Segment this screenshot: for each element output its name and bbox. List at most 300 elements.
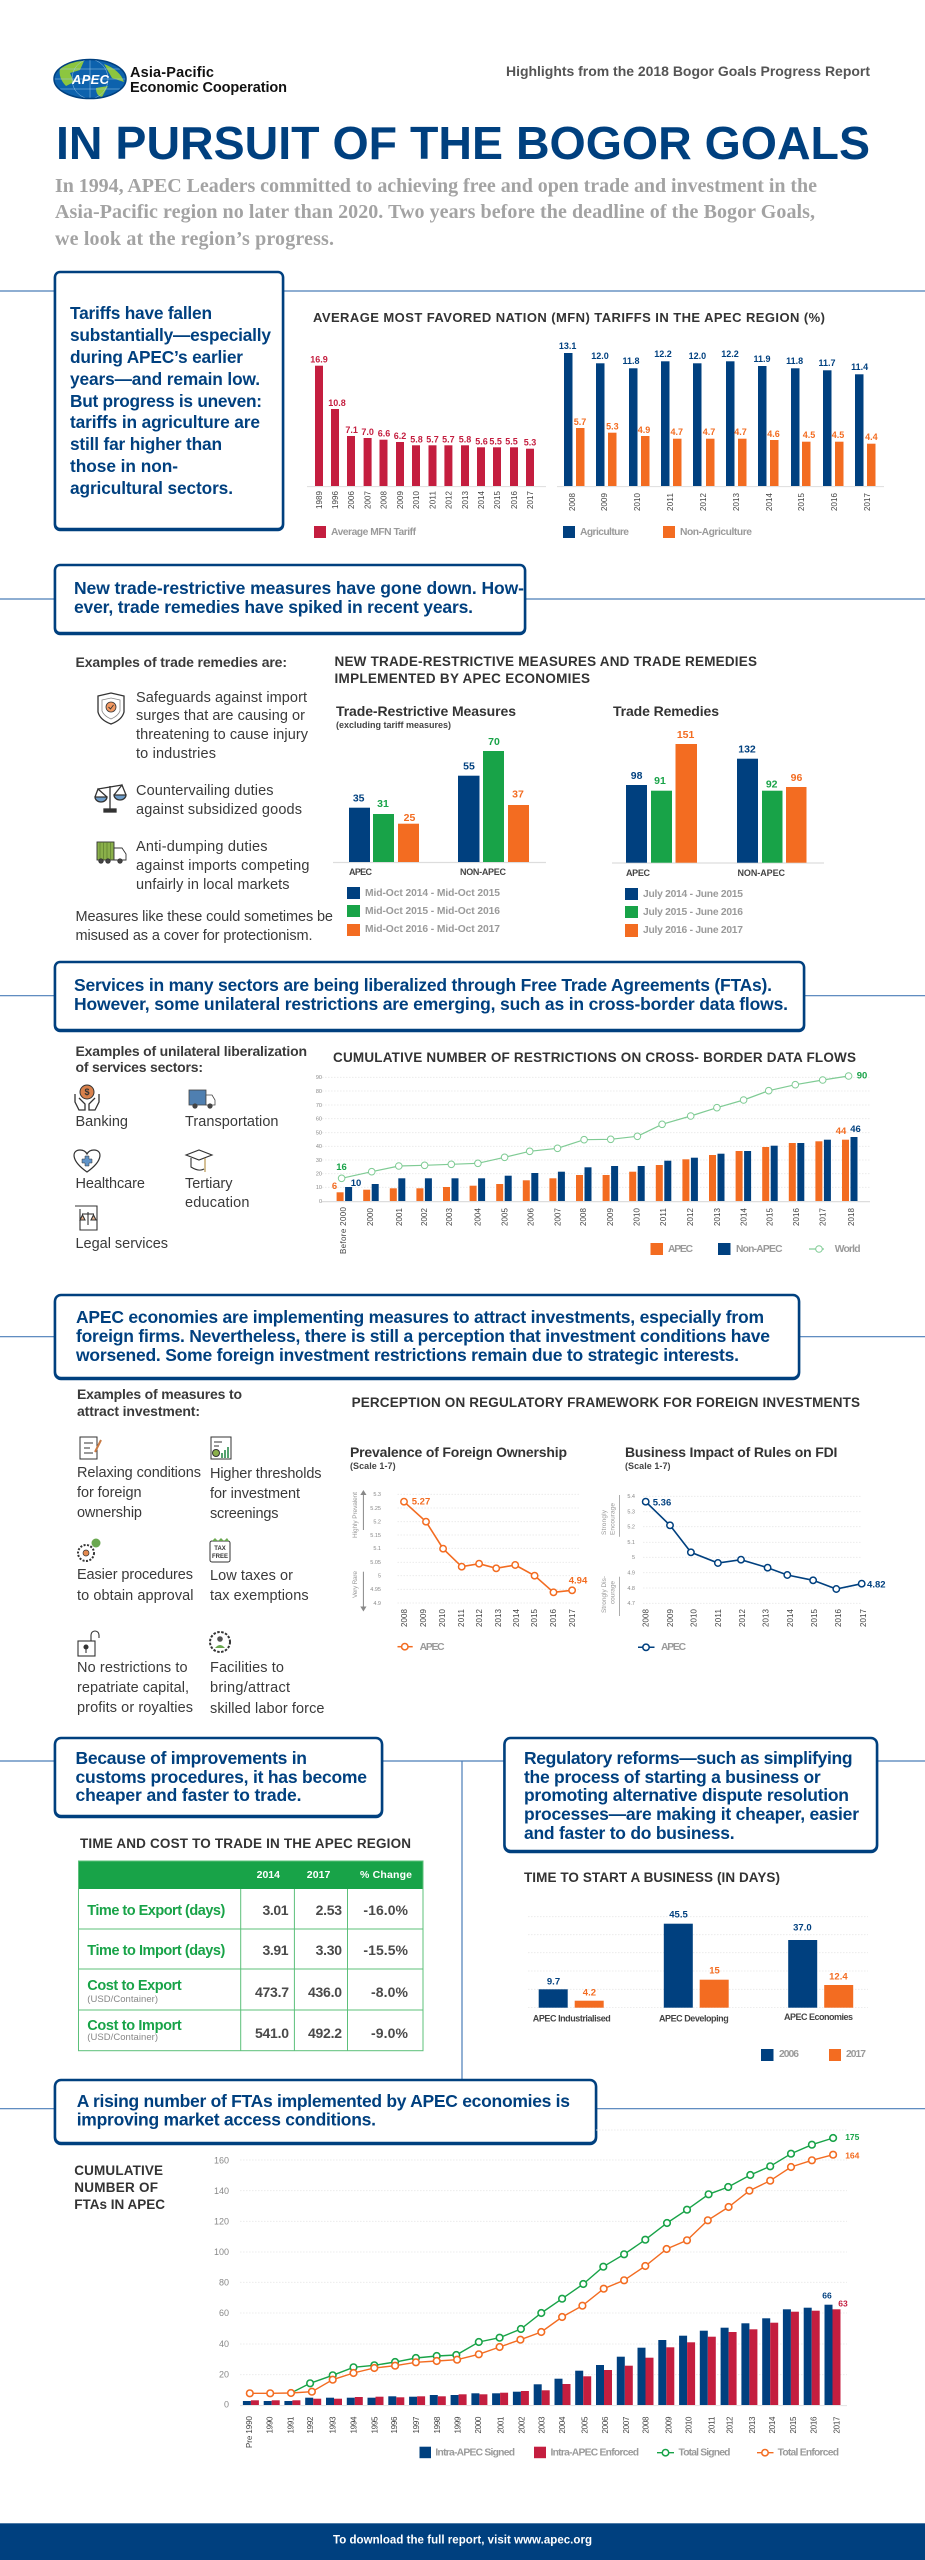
line chart: foreign ownership: Very Rare xyxy=(352,1571,359,1598)
table: time and cost to trade: 541.0 xyxy=(255,2025,289,2041)
combo chart: cumulative FTAs: 2006 xyxy=(601,2416,610,2434)
line chart: foreign ownership: Highly Prevalent xyxy=(352,1492,359,1538)
legend: trade-restrictive measures periods: Mid-Oct 2015 - Mid-Oct 2016 xyxy=(365,906,500,917)
bar chart: time to start a business: APEC Industrialised xyxy=(533,2014,611,2024)
text: relaxing conditions: Relaxing conditions xyxy=(77,1465,201,1481)
line chart: impact of rules on FDI: 2017 xyxy=(859,1608,868,1627)
callout: tariffs xyxy=(55,272,283,529)
section 3: services and data flows xyxy=(0,962,925,1255)
combo chart: cumulative FTAs: 2008 xyxy=(641,2416,650,2434)
bar chart: trade-restrictive measures: APEC xyxy=(349,867,372,877)
bar chart: average MFN tariff: 5.7 xyxy=(426,434,439,444)
legend: FTA series: Intra-APEC Enforced xyxy=(550,2448,639,2459)
bar chart: agriculture vs non-agriculture: 13.1 xyxy=(559,341,576,351)
line chart: impact of rules on FDI: 2013 xyxy=(762,1608,771,1627)
bar chart: average MFN tariff: 2011 xyxy=(428,490,438,509)
callout: trade-restrictive measures: ever, trade remedies have spiked in recent years. xyxy=(74,597,473,617)
text: higher thresholds: Higher thresholds xyxy=(210,1466,322,1482)
icon: tertiary education xyxy=(186,1150,212,1172)
bar chart: agriculture vs non-agriculture xyxy=(557,341,884,511)
bar chart: average MFN tariff: 1996 xyxy=(331,490,340,509)
legend: 2006 and 2017 xyxy=(761,2049,866,2061)
chart subtitle: trade-restrictive measures: Trade-Restrictive Measures xyxy=(336,703,516,719)
icon: legal services xyxy=(75,1206,97,1230)
line chart: impact of rules on FDI: 2015 xyxy=(810,1608,819,1627)
chart heading: MFN tariffs: AVERAGE MOST FAVORED NATION (MFN) TARIFFS IN THE APEC REGION (%) xyxy=(313,310,825,325)
chart subtitle: trade-restrictive measures xyxy=(336,703,516,730)
legend: trade remedies periods: July 2014 - June 2015 xyxy=(643,889,743,900)
section 5: connecting rules xyxy=(0,1738,925,2082)
chart subtitle: foreign ownership xyxy=(350,1444,567,1471)
bar chart: time to start a business: 15 xyxy=(709,1965,720,1976)
bar chart: average MFN tariff: 6.2 xyxy=(394,431,406,441)
bar chart: trade remedies xyxy=(612,729,824,878)
legend: FTA series: Total Enforced xyxy=(778,2448,839,2459)
table: time and cost to trade: -9.0% xyxy=(371,2025,409,2041)
text: examples of liberalization heading: Examples of unilateral liberalization xyxy=(76,1043,307,1059)
legend: trade remedies periods: July 2015 - June 2016 xyxy=(643,907,743,918)
bar chart: average MFN tariff: 2008 xyxy=(380,490,388,509)
callout: regulatory reforms: processes—are making it cheaper, easier xyxy=(524,1804,859,1824)
title: IN PURSUIT OF THE BOGOR GOALS xyxy=(56,117,870,169)
icon: unlocked padlock xyxy=(78,1631,99,1656)
bar chart: trade remedies: 91 xyxy=(654,775,666,787)
bar chart: agriculture vs non-agriculture: 4.7 xyxy=(734,427,747,437)
combo chart: data flow restrictions: 90 xyxy=(316,1075,322,1081)
bar chart: agriculture vs non-agriculture: 11.4 xyxy=(851,362,868,372)
combo chart: cumulative FTAs: 2002 xyxy=(517,2416,526,2434)
table: time and cost to trade: 2.53 xyxy=(316,1902,342,1918)
bar chart: trade-restrictive measures: 35 xyxy=(353,793,365,805)
table: time and cost to trade: % Change xyxy=(360,1869,412,1881)
combo chart: cumulative FTAs: 2016 xyxy=(810,2416,819,2434)
combo chart: cumulative FTAs: 66 xyxy=(822,2291,832,2301)
table heading: time and cost to trade: TIME AND COST TO TRADE IN THE APEC REGION xyxy=(80,1836,411,1851)
organisation name xyxy=(130,65,287,96)
bar chart: time to start a business: 12.4 xyxy=(829,1971,848,1982)
line chart: impact of rules on FDI: 5.36 xyxy=(653,1497,671,1508)
bar chart: average MFN tariff: 16.9 xyxy=(310,355,328,365)
bar chart: trade-restrictive measures: 70 xyxy=(488,736,500,748)
bar chart: trade-restrictive measures: 55 xyxy=(463,761,475,773)
combo chart: cumulative FTAs: 120 xyxy=(214,2216,229,2226)
combo chart: data flow restrictions: 2003 xyxy=(445,1207,454,1226)
combo chart: data flow restrictions: 20 xyxy=(316,1172,322,1178)
chart heading: cumulative FTAs: CUMULATIVE xyxy=(74,2163,163,2178)
icon: truck xyxy=(97,842,126,863)
combo chart: cumulative FTAs: 1995 xyxy=(370,2416,379,2434)
text: easier procedures xyxy=(77,1567,194,1604)
section 2: trade remedies xyxy=(0,565,925,944)
bar chart: agriculture vs non-agriculture: 12.0 xyxy=(689,351,706,361)
combo chart: cumulative FTAs: 60 xyxy=(219,2308,229,2318)
line chart: foreign ownership xyxy=(352,1491,588,1627)
icon: skilled worker gear xyxy=(210,1632,230,1652)
chart heading: cumulative FTAs: FTAs IN APEC xyxy=(74,2197,165,2212)
line chart: impact of rules on FDI: 2010 xyxy=(690,1608,699,1627)
bar chart: time to start a business: 37.0 xyxy=(793,1923,812,1934)
text: easier procedures: to obtain approval xyxy=(77,1588,194,1604)
text: low taxes xyxy=(210,1568,309,1604)
callout: trade-restrictive measures: New trade-restrictive measures have gone down. How- xyxy=(74,578,524,598)
icon: banking xyxy=(75,1085,99,1110)
combo chart: data flow restrictions: 2018 xyxy=(847,1207,856,1226)
table: time and cost to trade: Time to Export (days) xyxy=(87,1903,225,1919)
text: safeguards: to industries xyxy=(136,746,216,762)
line chart: impact of rules on FDI: 2008 xyxy=(642,1608,651,1627)
line chart: impact of rules on FDI: Strongly xyxy=(601,1509,608,1535)
bar chart: trade remedies: 96 xyxy=(791,772,802,784)
combo chart: cumulative FTAs: 175 xyxy=(845,2132,860,2142)
bar chart: agriculture vs non-agriculture: 4.5 xyxy=(832,430,844,440)
combo chart: data flow restrictions: 90 xyxy=(857,1071,867,1082)
table: time and cost to trade: (USD/Container) xyxy=(87,2032,158,2043)
bar chart: agriculture vs non-agriculture: 11.7 xyxy=(818,358,836,368)
line chart: foreign ownership: 5 xyxy=(378,1574,381,1580)
combo chart: cumulative FTAs: 140 xyxy=(214,2186,229,2196)
legend: FTA series xyxy=(420,2447,839,2459)
bar chart: agriculture vs non-agriculture: 11.8 xyxy=(786,356,803,366)
callout: tariffs: still far higher than xyxy=(70,434,222,454)
callout: tariffs: But progress is uneven: xyxy=(70,391,262,411)
combo chart: data flow restrictions: 40 xyxy=(316,1144,322,1150)
line chart: impact of rules on FDI xyxy=(601,1494,886,1627)
text: protectionism note xyxy=(76,909,333,944)
combo chart: data flow restrictions xyxy=(316,1071,870,1254)
combo chart: cumulative FTAs: 1999 xyxy=(454,2416,463,2434)
legend: trade remedies periods: July 2016 - June 2017 xyxy=(643,925,743,936)
line chart: impact of rules on FDI: 5.4 xyxy=(627,1494,635,1500)
bar chart: agriculture vs non-agriculture: 4.6 xyxy=(767,429,780,439)
bar chart: agriculture vs non-agriculture: 11.9 xyxy=(753,354,771,364)
callout: tariffs: substantially—especially xyxy=(70,325,271,345)
text: facilities: skilled labor force xyxy=(210,1701,324,1717)
bar chart: agriculture vs non-agriculture: 4.7 xyxy=(670,427,683,437)
icon: shield xyxy=(98,693,124,724)
table: time and cost to trade: -8.0% xyxy=(371,1984,409,2000)
icon: scroll and pen xyxy=(80,1437,101,1459)
chart heading: new measures and remedies: IMPLEMENTED BY APEC ECONOMIES xyxy=(334,671,590,686)
combo chart: cumulative FTAs: 2011 xyxy=(708,2416,717,2434)
table: time and cost to trade xyxy=(78,1861,423,2051)
text: safeguards xyxy=(136,690,309,762)
combo chart: data flow restrictions: 70 xyxy=(316,1103,322,1109)
bar chart: agriculture vs non-agriculture: 12.2 xyxy=(721,349,739,359)
line chart: foreign ownership: 4.94 xyxy=(569,1575,588,1586)
combo chart: data flow restrictions: Before 2000 xyxy=(339,1206,348,1254)
line chart: foreign ownership: 5.25 xyxy=(370,1506,381,1512)
bar chart: average MFN tariff: 7.0 xyxy=(361,427,374,437)
combo chart: cumulative FTAs: 1997 xyxy=(412,2416,421,2434)
table: time and cost to trade: -16.0% xyxy=(363,1902,409,1918)
bar chart: agriculture vs non-agriculture: 5.3 xyxy=(606,422,619,432)
line chart: impact of rules on FDI: 5.1 xyxy=(627,1540,635,1546)
legend: average MFN tariff: Average MFN Tariff xyxy=(331,527,417,538)
line chart: impact of rules on FDI: 2016 xyxy=(834,1608,843,1627)
bar chart: trade-restrictive measures: 37 xyxy=(512,789,524,801)
combo chart: data flow restrictions: 2016 xyxy=(792,1207,801,1226)
callout: regulatory reforms xyxy=(504,1738,877,1851)
line chart: impact of rules on FDI: 4.7 xyxy=(627,1601,635,1607)
combo chart: cumulative FTAs: 2009 xyxy=(664,2416,673,2434)
callout: attracting investments: foreign firms. Nevertheless, there is still a perception that investment conditions have xyxy=(76,1326,770,1346)
text: safeguards: Safeguards against import xyxy=(136,690,307,706)
callout: attracting investments: APEC economies are implementing measures to attract investments, especially from xyxy=(76,1307,764,1327)
chart subtitle: impact of rules on FDI: (Scale 1-7) xyxy=(625,1461,670,1471)
icon: healthcare xyxy=(74,1150,100,1172)
text: protectionism note: misused as a cover for protectionism. xyxy=(76,928,312,944)
table: time and cost to trade: Time to Import (days) xyxy=(87,1943,225,1959)
chart heading: perception: PERCEPTION ON REGULATORY FRAMEWORK FOR FOREIGN INVESTMENTS xyxy=(352,1395,860,1410)
text: low taxes: tax exemptions xyxy=(210,1588,309,1604)
line chart: foreign ownership: 2013 xyxy=(494,1608,503,1627)
table: time and cost to trade: 3.91 xyxy=(262,1942,289,1958)
logo: APEC globe xyxy=(54,60,126,98)
chart subtitle: impact of rules on FDI: Business Impact of Rules on FDI xyxy=(625,1444,837,1460)
combo chart: cumulative FTAs: 164 xyxy=(845,2151,860,2161)
bar chart: average MFN tariff: 5.3 xyxy=(524,438,536,448)
icon: tax free: TAX xyxy=(214,1546,226,1552)
legend: APEC, non-APEC, world: APEC xyxy=(668,1244,694,1255)
footer: To download the full report, visit www.apec.org xyxy=(333,2534,592,2546)
bar chart: average MFN tariff: 5.5 xyxy=(505,436,518,446)
line chart: impact of rules on FDI: Strongly Dis- xyxy=(601,1576,608,1613)
legend: FTA series: Total Signed xyxy=(678,2448,730,2459)
bar chart: trade-restrictive measures xyxy=(333,736,546,877)
line chart: impact of rules on FDI: 4.82 xyxy=(867,1579,886,1590)
combo chart: data flow restrictions: 2002 xyxy=(420,1207,429,1226)
table: time and cost to trade: 2017 xyxy=(307,1869,331,1881)
legend: foreign ownership APEC xyxy=(398,1642,445,1653)
bar chart: agriculture vs non-agriculture: 2014 xyxy=(765,492,774,511)
text: facilities xyxy=(210,1660,324,1717)
bar chart: agriculture vs non-agriculture: 12.0 xyxy=(591,351,609,361)
text: examples of trade remedies heading: Examples of trade remedies are: xyxy=(76,654,287,670)
text: anti-dumping duties: against imports competing xyxy=(136,858,310,874)
bar chart: agriculture vs non-agriculture: 11.8 xyxy=(622,356,640,366)
combo chart: data flow restrictions: 2000 xyxy=(366,1207,375,1226)
bar chart: agriculture vs non-agriculture: 2013 xyxy=(732,492,741,511)
bar chart: trade remedies: 132 xyxy=(738,744,756,756)
line chart: impact of rules on FDI: Encourage xyxy=(610,1503,616,1535)
bar chart: agriculture vs non-agriculture: 2015 xyxy=(797,492,806,511)
callout: regulatory reforms: Regulatory reforms—such as simplifying xyxy=(524,1748,853,1768)
combo chart: cumulative FTAs xyxy=(214,2130,860,2448)
line chart: impact of rules on FDI: 2011 xyxy=(714,1608,723,1627)
combo chart: data flow restrictions: 2005 xyxy=(501,1207,510,1226)
icon: tax free xyxy=(210,1538,230,1562)
callout: customs procedures: Because of improvements in xyxy=(76,1748,307,1768)
table: time and cost to trade: Cost to Import xyxy=(87,2018,182,2034)
callout: customs procedures: cheaper and faster to trade. xyxy=(76,1785,302,1805)
callout: tariffs: during APEC’s earlier xyxy=(70,347,243,367)
bar chart: agriculture vs non-agriculture: 4.9 xyxy=(638,425,650,435)
footer xyxy=(0,2523,925,2560)
bar chart: average MFN tariff: 5.5 xyxy=(489,436,502,446)
callout: trade-restrictive measures xyxy=(55,565,525,633)
combo chart: cumulative FTAs: Pre 1990 xyxy=(245,2415,254,2448)
combo chart: data flow restrictions: 30 xyxy=(316,1158,322,1164)
combo chart: cumulative FTAs: 2010 xyxy=(685,2416,694,2434)
bar chart: time to start a business: 45.5 xyxy=(669,1909,688,1920)
bar chart: trade-restrictive measures: 25 xyxy=(404,812,415,824)
text: easier procedures: Easier procedures xyxy=(77,1567,193,1583)
combo chart: data flow restrictions: 2017 xyxy=(819,1207,828,1226)
text: low taxes: Low taxes or xyxy=(210,1568,293,1584)
combo chart: data flow restrictions: 2012 xyxy=(686,1207,695,1226)
table: time and cost to trade: 3.30 xyxy=(316,1942,342,1958)
line chart: impact of rules on FDI: 4.9 xyxy=(627,1570,635,1576)
callout: rising number of FTAs xyxy=(55,2080,596,2143)
legend: 2006 and 2017: 2006 xyxy=(779,2049,799,2060)
bar chart: average MFN tariff: 2017 xyxy=(526,490,535,509)
bar chart: time to start a business: 9.7 xyxy=(547,1977,560,1988)
bar chart: agriculture vs non-agriculture: 5.7 xyxy=(574,417,586,427)
line chart: foreign ownership: 4.9 xyxy=(373,1601,381,1607)
text: transportation: Transportation xyxy=(185,1114,278,1130)
line chart: impact of rules on FDI: 2009 xyxy=(666,1608,675,1627)
line chart: foreign ownership: 5.05 xyxy=(370,1560,381,1566)
callout: tariffs: tariffs in agriculture are xyxy=(70,412,260,432)
legend: trade-restrictive measures periods xyxy=(347,887,500,936)
icon: tax free: FREE xyxy=(212,1554,228,1560)
bar chart: average MFN tariff: 2009 xyxy=(396,490,405,509)
bar chart: average MFN tariff: 5.6 xyxy=(475,436,488,446)
line chart: foreign ownership: 5.27 xyxy=(412,1497,430,1508)
callout: regulatory reforms: and faster to do business. xyxy=(524,1823,735,1843)
callout: tariffs: years—and remain low. xyxy=(70,369,260,389)
chart subtitle: trade remedies: Trade Remedies xyxy=(613,703,719,719)
combo chart: cumulative FTAs: 40 xyxy=(219,2339,229,2349)
callout: services liberalization xyxy=(55,962,804,1030)
line chart: foreign ownership: 5.2 xyxy=(373,1520,381,1526)
text: safeguards: threatening to cause injury xyxy=(136,727,309,743)
text: countervailing duties: Countervailing duties xyxy=(136,783,274,799)
combo chart: cumulative FTAs: 2005 xyxy=(581,2416,590,2434)
bar chart: average MFN tariff xyxy=(307,355,546,509)
line chart: impact of rules on FDI: 5 xyxy=(632,1555,635,1561)
bar chart: agriculture vs non-agriculture: 2008 xyxy=(568,492,577,511)
legend: trade-restrictive measures periods: Mid-Oct 2016 - Mid-Oct 2017 xyxy=(365,924,500,935)
icon: gears xyxy=(78,1538,100,1561)
chart heading: data flow restrictions: CUMULATIVE NUMBER OF RESTRICTIONS ON CROSS- BORDER DATA FLOWS xyxy=(333,1050,856,1065)
line chart: impact of rules on FDI: 5.2 xyxy=(627,1524,635,1530)
line chart: foreign ownership: 5.1 xyxy=(373,1546,381,1552)
combo chart: cumulative FTAs: 2015 xyxy=(789,2416,798,2434)
bar chart: average MFN tariff: 6.6 xyxy=(378,429,390,439)
combo chart: data flow restrictions: 60 xyxy=(316,1116,322,1122)
bar chart: agriculture vs non-agriculture: 2011 xyxy=(666,492,675,511)
bar chart: agriculture vs non-agriculture: 4.7 xyxy=(703,427,715,437)
text: no restrictions: profits or royalties xyxy=(77,1700,193,1716)
combo chart: cumulative FTAs: 1998 xyxy=(433,2416,442,2434)
combo chart: cumulative FTAs: 2013 xyxy=(748,2416,757,2434)
combo chart: cumulative FTAs: 1993 xyxy=(329,2416,338,2434)
combo chart: data flow restrictions: 80 xyxy=(316,1089,322,1095)
legend: APEC, non-APEC, world xyxy=(650,1243,860,1255)
text: higher thresholds xyxy=(210,1466,322,1522)
text: tertiary education: Tertiary xyxy=(185,1176,233,1192)
combo chart: data flow restrictions: 6 xyxy=(332,1181,337,1192)
intro text: Asia-Pacific region no later than 2020. Two years before the deadline of the Bogor Goals, xyxy=(55,201,815,223)
combo chart: cumulative FTAs: 100 xyxy=(214,2247,229,2257)
legend: APEC, non-APEC, world: Non-APEC xyxy=(736,1244,783,1255)
text: protectionism note: Measures like these could sometimes be xyxy=(76,909,333,925)
bar chart: agriculture vs non-agriculture: 4.4 xyxy=(865,432,878,442)
legend: FDI rules APEC xyxy=(638,1642,687,1653)
callout: customs procedures xyxy=(55,1738,382,1816)
bar chart: time to start a business xyxy=(528,1909,868,2024)
combo chart: cumulative FTAs: 2007 xyxy=(622,2416,631,2434)
bar chart: trade-restrictive measures: 31 xyxy=(377,798,389,810)
text: examples of liberalization heading: of services sectors: xyxy=(76,1059,203,1075)
text: banking: Banking xyxy=(76,1114,128,1130)
bar chart: time to start a business: APEC Developing xyxy=(659,2014,729,2024)
bar chart: average MFN tariff: 5.8 xyxy=(410,434,423,444)
table: time and cost to trade: 492.2 xyxy=(308,2025,342,2041)
combo chart: cumulative FTAs: 1991 xyxy=(287,2416,296,2434)
callout: rising number of FTAs: improving market access conditions. xyxy=(77,2110,376,2130)
chart subtitle: impact of rules on FDI xyxy=(625,1444,837,1471)
text: higher thresholds: for investment xyxy=(210,1486,300,1502)
combo chart: data flow restrictions: 2007 xyxy=(554,1207,562,1226)
bar chart: average MFN tariff: 10.8 xyxy=(328,398,346,408)
bar chart: agriculture vs non-agriculture: 2010 xyxy=(633,492,642,511)
legend: foreign ownership APEC: APEC xyxy=(420,1642,445,1653)
line chart: foreign ownership: 4.95 xyxy=(370,1587,381,1593)
bar chart: trade remedies: APEC xyxy=(626,868,650,878)
text: examples of investment measures heading: Examples of measures to xyxy=(77,1386,242,1402)
text: no restrictions: repatriate capital, xyxy=(77,1680,189,1696)
text: anti-dumping duties: Anti-dumping duties xyxy=(136,839,268,855)
combo chart: data flow restrictions: 16 xyxy=(336,1162,347,1173)
bar chart: average MFN tariff: 2015 xyxy=(493,490,502,509)
bar chart: average MFN tariff: 5.7 xyxy=(442,434,455,444)
chart heading: time to start a business: TIME TO START A BUSINESS (IN DAYS) xyxy=(524,1870,780,1885)
combo chart: data flow restrictions: 2006 xyxy=(526,1207,535,1226)
line chart: foreign ownership: 2017 xyxy=(568,1608,577,1627)
icon: scales xyxy=(95,785,126,812)
line chart: foreign ownership: 5.15 xyxy=(370,1533,381,1539)
organisation name: Asia-Pacific xyxy=(130,65,214,81)
line chart: impact of rules on FDI: 5.3 xyxy=(627,1510,635,1516)
callout: attracting investments xyxy=(55,1295,799,1378)
callout: attracting investments: worsened. Some foreign investment restrictions remain due to strategic interests. xyxy=(75,1345,739,1365)
bar chart: average MFN tariff: 2012 xyxy=(444,490,453,509)
text: tertiary education: education xyxy=(185,1195,250,1211)
bar chart: time to start a business: 4.2 xyxy=(583,1987,596,1998)
chart heading: new measures and remedies xyxy=(334,654,757,686)
chart subtitle: foreign ownership: Prevalence of Foreign Ownership xyxy=(350,1444,567,1460)
combo chart: cumulative FTAs: 20 xyxy=(219,2370,229,2380)
callout: customs procedures: customs procedures, it has become xyxy=(76,1767,367,1787)
line chart: foreign ownership: 2008 xyxy=(400,1608,409,1627)
bar chart: trade-restrictive measures: NON-APEC xyxy=(460,867,506,877)
callout: tariffs: those in non- xyxy=(70,456,178,476)
combo chart: cumulative FTAs: 63 xyxy=(838,2299,848,2309)
text: anti-dumping duties: unfairly in local markets xyxy=(136,877,290,893)
combo chart: data flow restrictions: 2008 xyxy=(579,1207,588,1226)
text: relaxing conditions: ownership xyxy=(77,1505,142,1521)
line chart: foreign ownership: 2015 xyxy=(530,1608,539,1627)
bar chart: agriculture vs non-agriculture: 12.2 xyxy=(654,349,672,359)
table: time and cost to trade: 436.0 xyxy=(308,1984,342,2000)
combo chart: cumulative FTAs: 1994 xyxy=(350,2416,358,2434)
bar chart: average MFN tariff: 2014 xyxy=(477,490,486,509)
combo chart: data flow restrictions: 2004 xyxy=(474,1207,482,1226)
combo chart: cumulative FTAs: 2001 xyxy=(496,2416,506,2434)
bar chart: average MFN tariff: 2010 xyxy=(412,490,421,509)
